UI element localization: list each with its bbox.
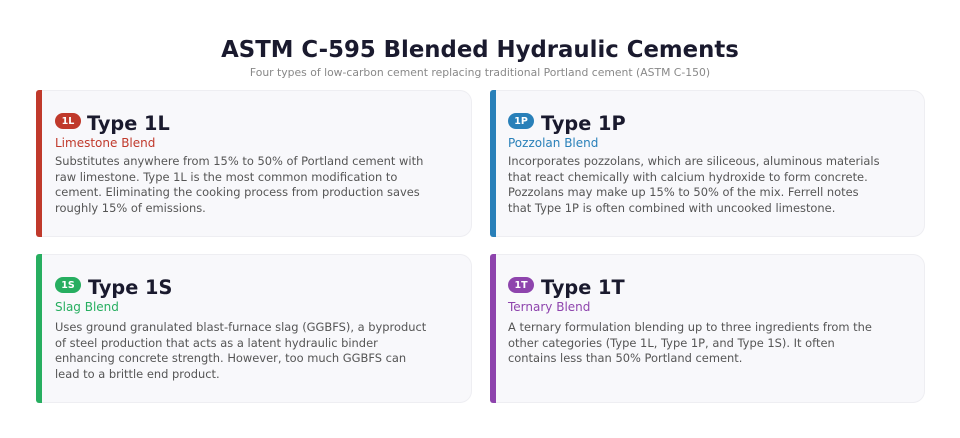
description: Type 1P: [508, 154, 880, 215]
accent bar: [490, 254, 496, 403]
description: Type 1P: that react chemically with calcium hydroxide to form concrete.: [508, 170, 868, 184]
badge: 1L: [55, 113, 81, 129]
badge: 1S: [55, 277, 81, 293]
accent bar: [36, 254, 42, 403]
description: Type 1T: A ternary formulation blending up to three ingredients from the: [508, 320, 872, 334]
description: Type 1L: [55, 154, 423, 215]
subheading: Limestone Blend: Limestone Blend: [55, 136, 155, 150]
description: Type 1S: enhancing concrete strength. However, too much GGBFS can: [55, 351, 406, 365]
description: Type 1T: contains less than 50% Portland cement.: [508, 351, 742, 365]
description: Type 1L: roughly 15% of emissions.: [55, 201, 206, 215]
description: Type 1T: other categories (Type 1L, Type 1P, and Type 1S). It often: [508, 336, 835, 350]
subheading: Pozzolan Blend: Pozzolan Blend: [508, 136, 598, 150]
badge: 1S: 1S: [61, 280, 75, 291]
subheading: Slag Blend: Slag Blend: [55, 300, 119, 314]
description: Type 1P: Incorporates pozzolans, which are siliceous, aluminous materials: [508, 154, 880, 168]
subtitle: Four types of low-carbon cement replacing traditional Portland cement (ASTM C-150): [250, 66, 710, 78]
panel: Type 1L: [36, 90, 472, 237]
badge: 1P: [508, 113, 534, 129]
description: Type 1L: Substitutes anywhere from 15% to 50% of Portland cement with: [55, 154, 423, 168]
badge: 1L: 1L: [62, 116, 74, 127]
badge: 1T: [508, 277, 534, 293]
badge: 1P: 1P: [514, 116, 528, 127]
description: Type 1S: lead to a brittle end product.: [55, 367, 220, 381]
description: Type 1S: [55, 320, 426, 381]
panel: Type 1T: [490, 254, 925, 403]
description: Type 1T: [508, 320, 872, 365]
accent bar: [490, 90, 496, 237]
title: ASTM C-595 Blended Hydraulic Cements: [221, 37, 739, 63]
description: Type 1P: that Type 1P is often combined with uncooked limestone.: [508, 201, 835, 215]
badge: 1T: 1T: [514, 280, 528, 291]
heading: Type 1P: Type 1P: [541, 112, 626, 135]
description: Type 1S: of steel production that acts as a latent hydraulic binder: [55, 336, 378, 350]
heading: Type 1L: Type 1L: [87, 112, 170, 135]
description: Type 1L: cement. Eliminating the cooking process from production saves: [55, 185, 420, 199]
heading: Type 1S: Type 1S: [88, 276, 172, 299]
subheading: Ternary Blend: Ternary Blend: [508, 300, 590, 314]
panel: Type 1S: [36, 254, 472, 403]
panel: Type 1P: [490, 90, 925, 237]
description: Type 1S: Uses ground granulated blast-furnace slag (GGBFS), a byproduct: [55, 320, 426, 334]
description: Type 1P: Pozzolans may make up 15% to 50% of the mix. Ferrell notes: [508, 185, 859, 199]
accent bar: [36, 90, 42, 237]
heading: Type 1T: Type 1T: [541, 276, 625, 299]
description: Type 1L: raw limestone. Type 1L is the most common modification to: [55, 170, 397, 184]
